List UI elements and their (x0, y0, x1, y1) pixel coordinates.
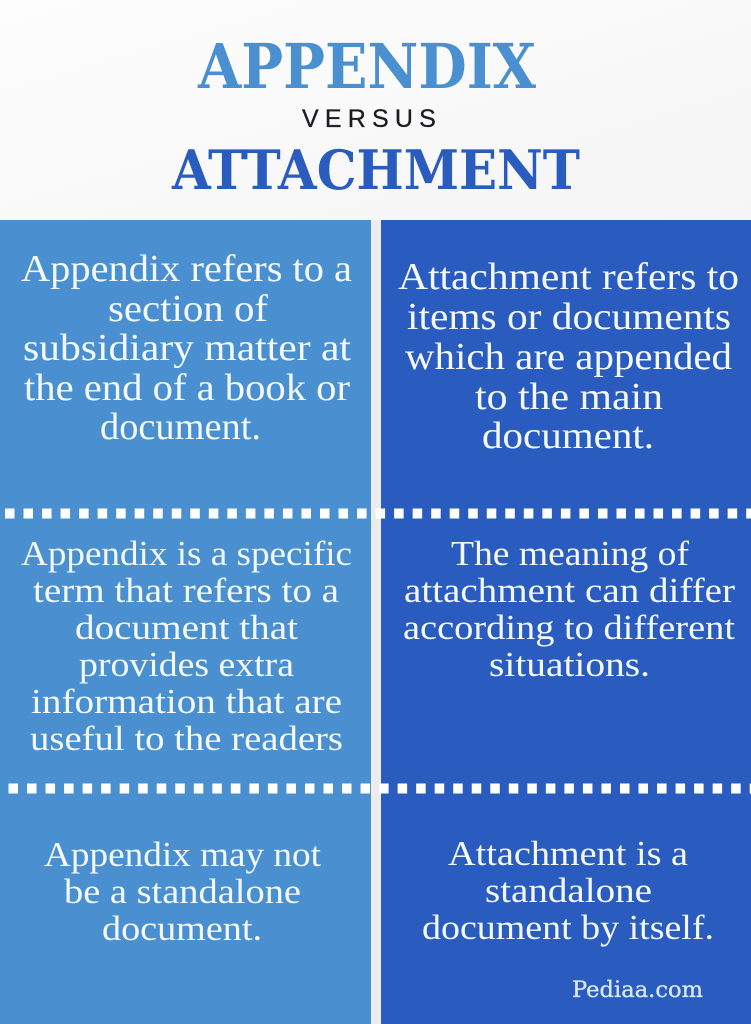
text block: appendix specific term: information that are (31, 682, 342, 721)
title: Appendix: APPENDIX (197, 30, 537, 103)
panel: appendix column (0, 220, 371, 1024)
text block: appendix specific term: Appendix is a specific (21, 534, 352, 573)
text block: attachment definition: document. (482, 415, 654, 457)
divider: dotted row 1 (5, 508, 751, 518)
text block: attachment standalone: Attachment is a (448, 834, 689, 873)
text block: attachment standalone: standalone (485, 871, 652, 910)
text block: appendix standalone (44, 835, 321, 948)
panel: attachment column (381, 220, 751, 1024)
subtitle: versus: VERSUS (302, 105, 442, 133)
text block: attachment meaning: situations. (489, 645, 650, 684)
text block: attachment definition (398, 256, 739, 457)
text block: attachment definition: Attachment refers to (398, 256, 739, 298)
text block: appendix standalone: document. (102, 909, 262, 948)
text block: appendix definition: the end of a book or (24, 367, 350, 409)
text block: attachment definition: which are appended (405, 336, 732, 378)
text block: attachment meaning: attachment can differ (404, 571, 735, 610)
text block: attachment definition: items or documents (407, 296, 731, 338)
text block: appendix specific term: term that refers to a (33, 571, 340, 610)
text block: attachment meaning: The meaning of (451, 534, 689, 573)
text block: appendix definition: Appendix refers to a (21, 248, 352, 290)
divider: dotted row 2 (8, 784, 751, 794)
text block: appendix standalone: Appendix may not (44, 835, 321, 874)
text block: appendix standalone: be a standalone (64, 872, 301, 911)
text block: appendix definition (21, 248, 352, 448)
text block: appendix specific term (21, 534, 352, 758)
text block: appendix definition: subsidiary matter at (23, 327, 351, 369)
text block: appendix definition: document. (100, 406, 261, 448)
logo: Pediaa.com: Pediaa.com (572, 978, 703, 1003)
text block: attachment standalone (422, 834, 714, 947)
text block: appendix specific term: document that (75, 608, 298, 647)
text block: appendix definition: section of (108, 288, 268, 330)
text block: appendix specific term: provides extra (79, 645, 295, 684)
title: Attachment: ATTACHMENT (171, 138, 580, 202)
text block: attachment meaning: according to different (403, 608, 735, 647)
text block: attachment standalone: document by itself. (422, 908, 714, 947)
text block: appendix specific term: useful to the readers (30, 719, 343, 758)
text block: attachment meaning (403, 534, 735, 684)
text block: attachment definition: to the main (475, 376, 663, 418)
